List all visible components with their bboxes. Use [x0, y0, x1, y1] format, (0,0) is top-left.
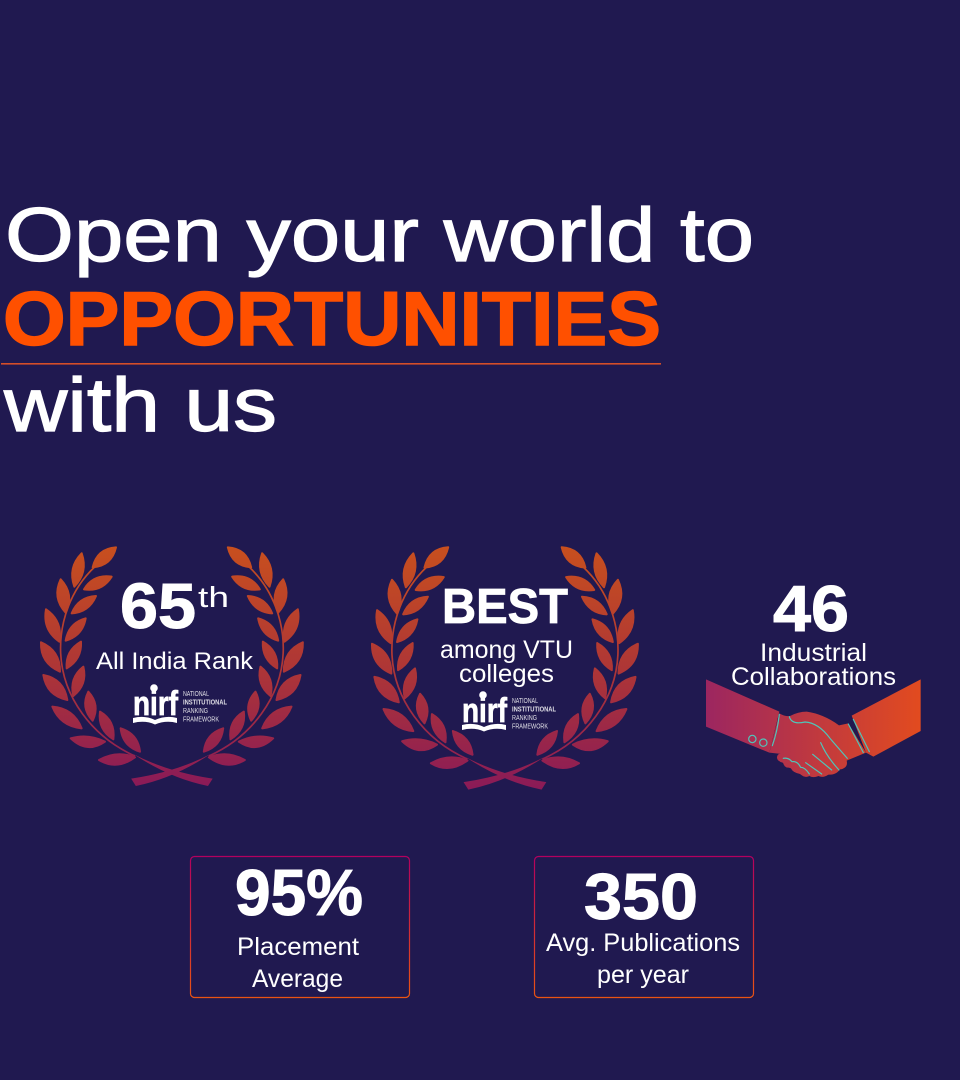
label line 2: Average — [252, 965, 343, 993]
best label line 1: among VTU — [440, 636, 573, 664]
best label line 2: colleges — [459, 660, 554, 688]
rank number: 65 — [120, 570, 196, 642]
logo: nirf: FRAMEWORK — [512, 722, 548, 730]
stat label line 2: Collaborations — [731, 663, 896, 691]
logo: nirf: NATIONAL — [183, 689, 209, 698]
logo: nirf: RANKING — [183, 706, 208, 715]
panel border — [534, 856, 754, 998]
logo: nirf — [462, 691, 556, 732]
headline — [1, 193, 754, 448]
headline highlight: OPPORTUNITIES: OPPORTUNITIES — [3, 277, 661, 362]
headline line: with us: with us — [3, 363, 277, 448]
logo: nirf: nirf — [133, 685, 179, 723]
headline underline — [1, 363, 661, 365]
rank suffix: th — [198, 582, 229, 614]
icon: handshake — [706, 679, 921, 777]
label line 2: per year — [597, 961, 689, 989]
stat number: 46 — [773, 572, 849, 645]
logo: nirf — [133, 684, 227, 724]
logo: nirf: RANKING — [512, 713, 537, 722]
best heading: BEST — [442, 580, 568, 634]
logo: nirf: INSTITUTIONAL — [512, 704, 556, 714]
icon: laurel wreath — [372, 547, 638, 790]
headline line: Open your world to: Open your world to — [5, 193, 754, 278]
icon: laurel wreath — [41, 547, 303, 786]
award: Best among VTU colleges — [372, 547, 638, 790]
logo: nirf: nirf — [462, 692, 508, 730]
label line 1: Avg. Publications — [546, 929, 740, 957]
logo: nirf: FRAMEWORK — [183, 714, 219, 724]
logo: nirf: INSTITUTIONAL — [183, 698, 227, 706]
stat label line 1: Industrial — [760, 639, 867, 667]
panel: publications — [534, 856, 754, 998]
panel: placement average — [190, 856, 410, 998]
stat: 46 Industrial Collaborations — [706, 572, 921, 777]
logo: nirf: NATIONAL — [512, 696, 538, 705]
stat number: 95% — [235, 856, 363, 929]
panel border — [190, 856, 410, 998]
award: 65th All India Rank — [41, 547, 303, 786]
rank label: All India Rank — [96, 648, 254, 675]
label line 1: Placement — [237, 933, 359, 961]
stat number: 350 — [584, 860, 698, 933]
